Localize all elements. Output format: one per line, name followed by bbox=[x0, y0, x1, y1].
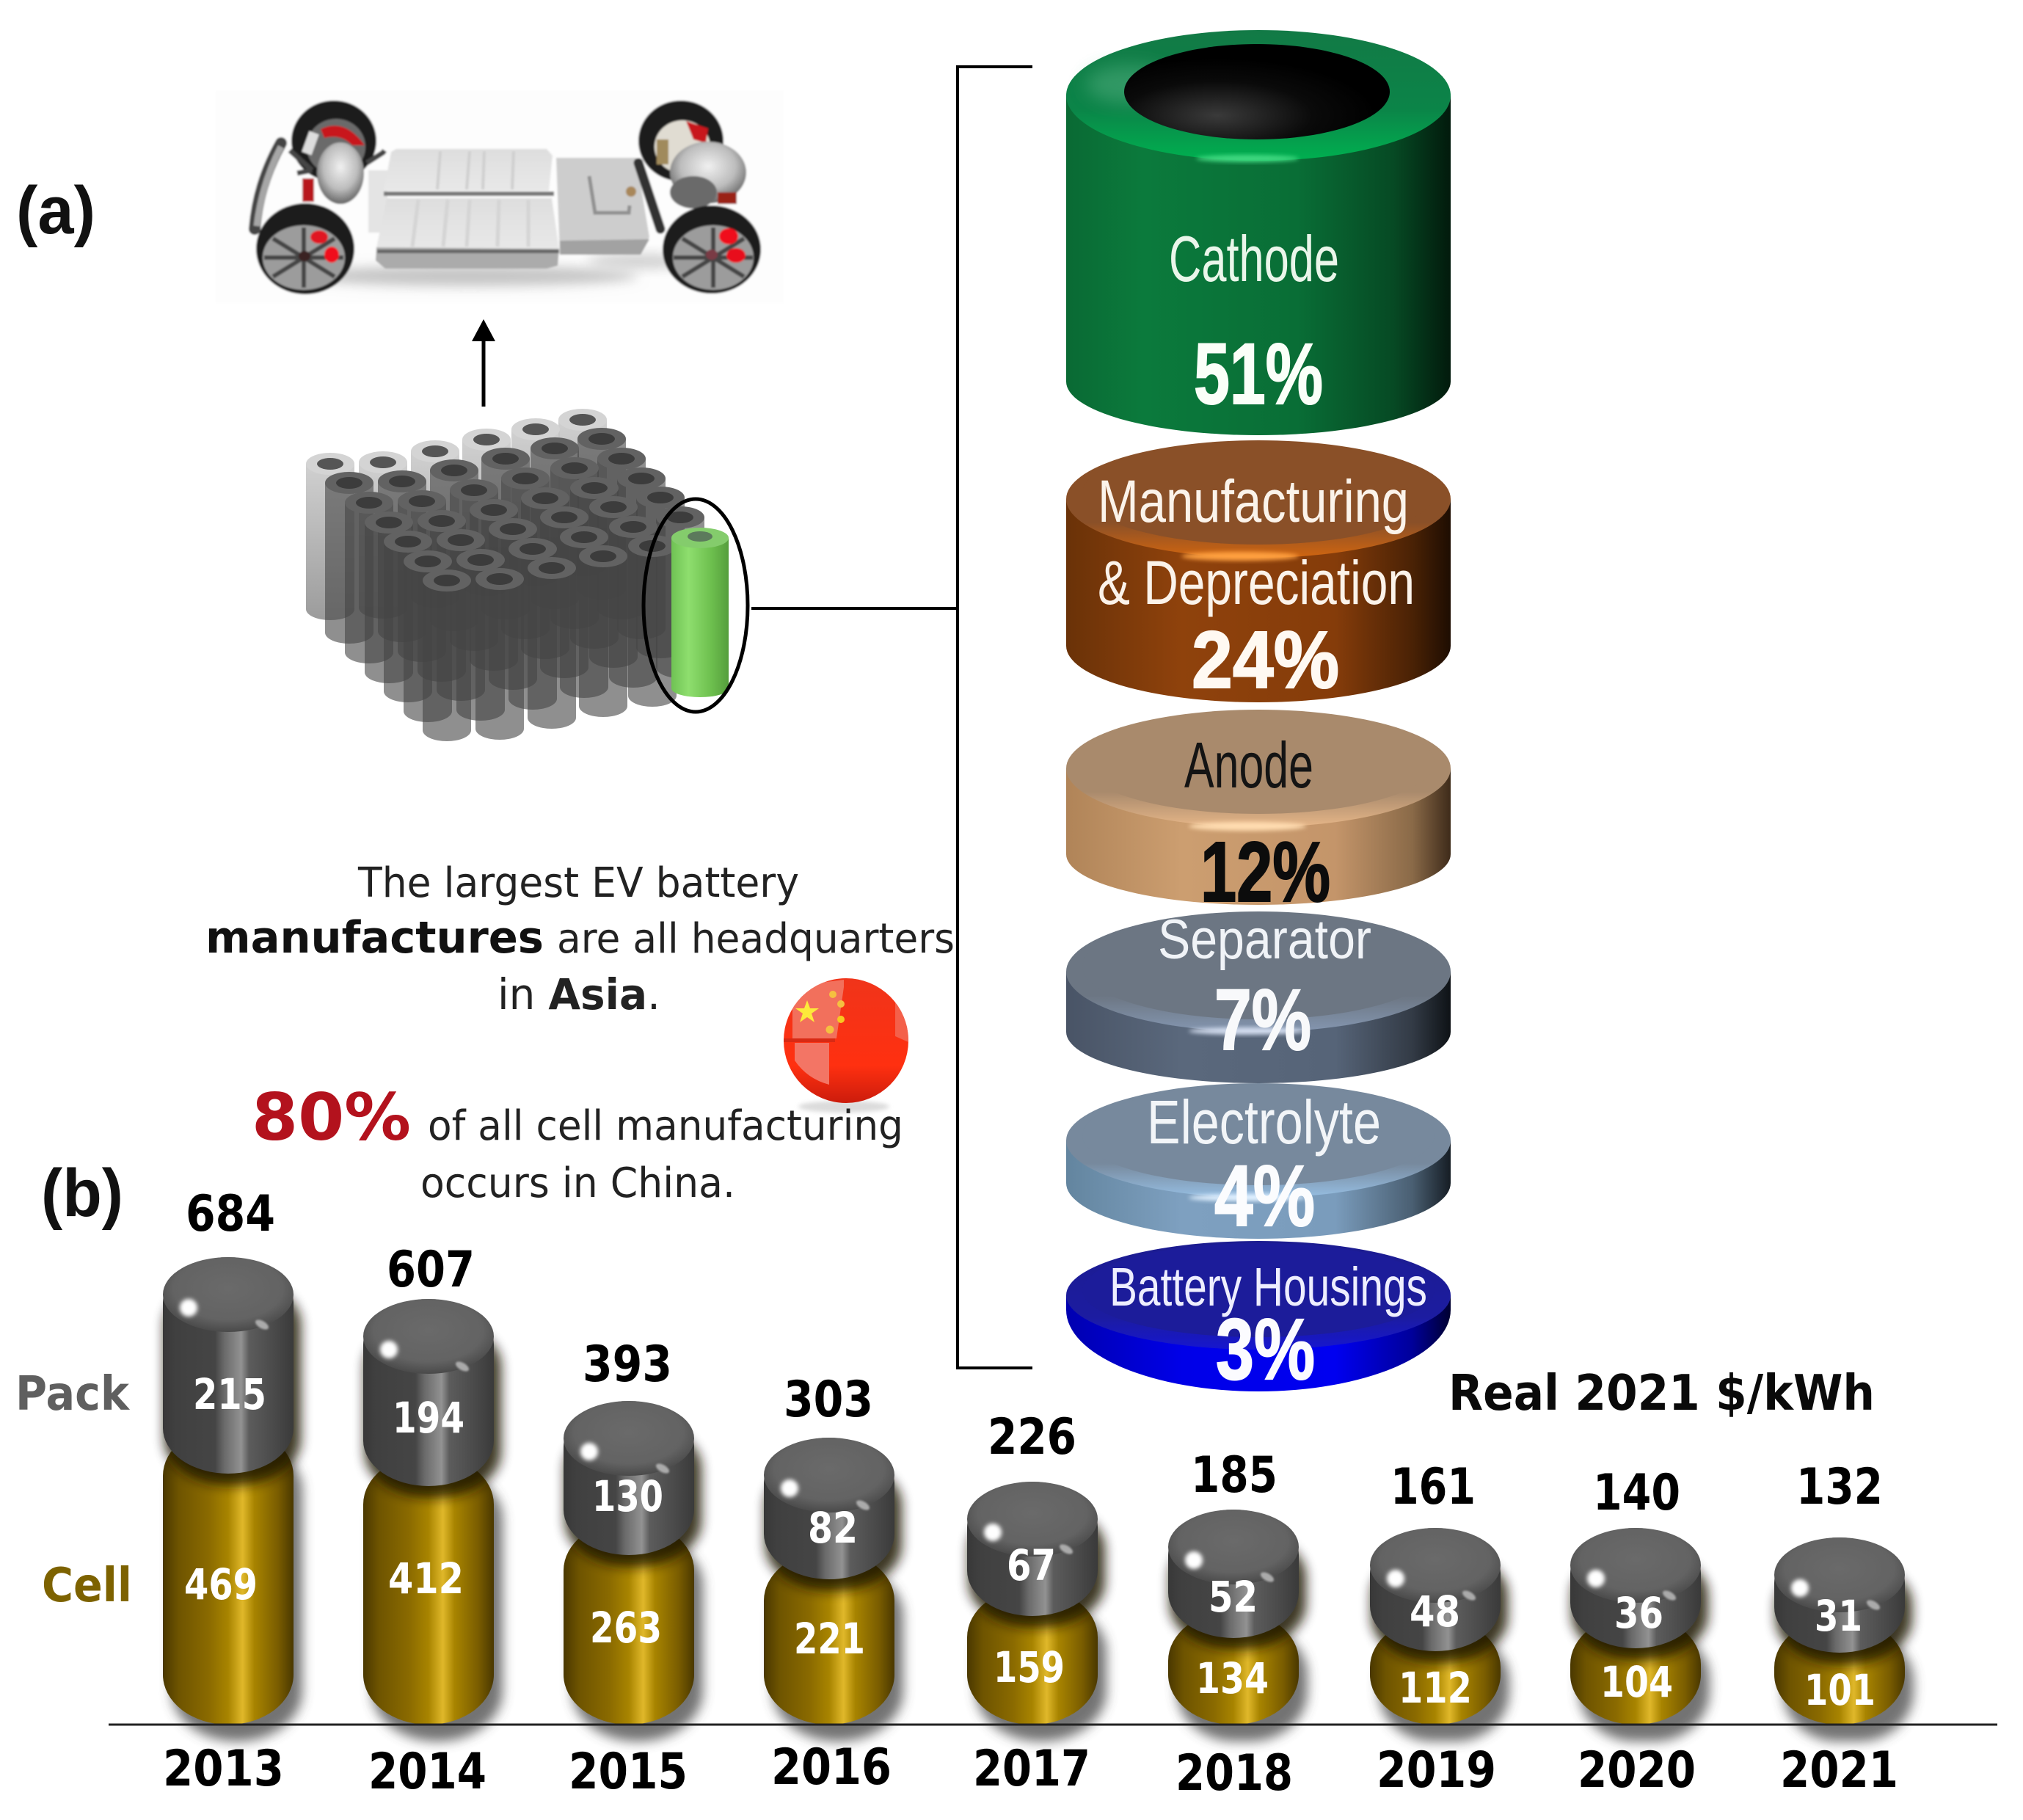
total value: 185 bbox=[1191, 1446, 1277, 1504]
bar 2019 bbox=[1370, 1458, 1509, 1799]
rear left wheel and brake bbox=[291, 101, 376, 181]
year: 2017 bbox=[973, 1740, 1090, 1798]
value: 51%: 51% bbox=[1194, 326, 1323, 423]
callout: 80% of cell manufacturing in China bbox=[252, 1080, 903, 1207]
chart axis baseline bbox=[109, 1723, 1997, 1726]
icon: battery module of cylindrical cells bbox=[306, 409, 704, 741]
pack value: 48 bbox=[1410, 1587, 1460, 1637]
bar 2016 bbox=[764, 1371, 903, 1797]
left motor bbox=[317, 142, 364, 204]
bar 2021 bbox=[1774, 1458, 1914, 1799]
year: 2016 bbox=[771, 1739, 892, 1797]
cell value: 112 bbox=[1399, 1663, 1472, 1713]
pack value: 194 bbox=[393, 1393, 464, 1443]
cell value: 412 bbox=[388, 1554, 464, 1604]
bar 2014 bbox=[363, 1241, 503, 1801]
label: manufacturing: Manufacturing bbox=[1098, 468, 1409, 535]
label: depreciation: & Depreciation bbox=[1098, 548, 1415, 617]
junction box outline bbox=[589, 176, 630, 213]
icon: highlighted green cell bbox=[671, 528, 729, 697]
battery slab edge bbox=[376, 247, 559, 269]
total value: 132 bbox=[1796, 1458, 1883, 1516]
value: 4%: 4% bbox=[1214, 1148, 1315, 1245]
unit label: Real 2021 $/kWh bbox=[1448, 1364, 1875, 1422]
disc: anode bbox=[1066, 710, 1451, 920]
year: 2019 bbox=[1377, 1741, 1496, 1799]
bar chart: battery pack price 2013-2021 bbox=[163, 1185, 1914, 1802]
battery slab front bbox=[376, 198, 559, 250]
left suspension arm bbox=[255, 143, 281, 229]
bar 2013 bbox=[163, 1185, 302, 1798]
year: 2015 bbox=[569, 1743, 688, 1801]
year: 2021 bbox=[1780, 1741, 1898, 1799]
callout ellipse around single cell bbox=[644, 499, 748, 712]
bar 2015 bbox=[564, 1336, 703, 1801]
year: 2013 bbox=[163, 1740, 284, 1798]
right motor bbox=[670, 142, 746, 203]
disc: separator bbox=[1066, 909, 1451, 1083]
value: 7%: 7% bbox=[1214, 972, 1311, 1069]
text block: manufacturers in Asia: in Asia. bbox=[497, 969, 660, 1019]
label: electrolyte: Electrolyte bbox=[1147, 1088, 1381, 1157]
label: cathode: Cathode bbox=[1169, 222, 1339, 295]
pack value: 52 bbox=[1209, 1572, 1258, 1622]
value: 3%: 3% bbox=[1216, 1301, 1315, 1398]
rear right wheel and brake bbox=[638, 101, 723, 181]
text block: manufacturers in Asia: The largest EV battery bbox=[357, 859, 799, 907]
disc: manufacturing and depreciation bbox=[1066, 440, 1451, 705]
total value: 161 bbox=[1390, 1458, 1476, 1516]
total value: 684 bbox=[186, 1185, 275, 1243]
pack value: 130 bbox=[592, 1471, 663, 1521]
cell value: 104 bbox=[1600, 1657, 1673, 1707]
cell value: 134 bbox=[1196, 1653, 1269, 1703]
text block: manufacturers in Asia: are all headquarters bbox=[557, 915, 955, 963]
year: 2014 bbox=[368, 1743, 486, 1801]
total value: 226 bbox=[988, 1408, 1076, 1466]
panel label (a): (a) bbox=[16, 173, 95, 248]
cell value: 101 bbox=[1804, 1665, 1876, 1715]
cell value: 263 bbox=[590, 1603, 662, 1653]
value: 24%: 24% bbox=[1192, 615, 1339, 705]
front right wheel bbox=[663, 205, 761, 294]
bar 2020 bbox=[1570, 1464, 1710, 1799]
year: 2020 bbox=[1578, 1741, 1696, 1799]
arrow from cell pack up to chassis bbox=[472, 319, 495, 407]
legend label: cell: Cell bbox=[42, 1559, 132, 1613]
disc: cathode bbox=[1066, 30, 1451, 435]
left strut bbox=[302, 178, 314, 202]
disc: battery housings bbox=[1066, 1241, 1451, 1398]
callout: 80% of cell manufacturing in China: of all cell manufacturing bbox=[428, 1102, 903, 1150]
pack value: 36 bbox=[1614, 1588, 1663, 1638]
panel: cost breakdown stack bbox=[1066, 30, 1451, 1398]
battery slab rear bbox=[384, 149, 553, 191]
icon: China flag ball bbox=[784, 978, 908, 1113]
bar 2018 bbox=[1168, 1446, 1308, 1802]
total value: 140 bbox=[1593, 1464, 1680, 1522]
pack value: 215 bbox=[193, 1369, 266, 1419]
year: 2018 bbox=[1175, 1744, 1293, 1802]
front left wheel bbox=[256, 203, 354, 294]
label: anode: Anode bbox=[1184, 729, 1313, 801]
bar 2017 bbox=[967, 1408, 1107, 1798]
total value: 607 bbox=[387, 1241, 475, 1299]
cell value: 221 bbox=[794, 1614, 865, 1664]
callout: 80% of cell manufacturing in China: 80% bbox=[252, 1080, 411, 1155]
label: battery housings: Battery Housings bbox=[1109, 1256, 1427, 1317]
bracket connecting cell to cost stack bbox=[751, 67, 1032, 1368]
right dark frame arm bbox=[638, 163, 660, 229]
pack value: 67 bbox=[1007, 1540, 1056, 1590]
value: 12%: 12% bbox=[1200, 824, 1330, 920]
panel label (b): (b) bbox=[41, 1156, 123, 1231]
total value: 393 bbox=[583, 1336, 672, 1394]
legend label: pack: Pack bbox=[15, 1367, 130, 1422]
callout: 80% of cell manufacturing in China: occurs in China. bbox=[420, 1160, 735, 1207]
cell value: 469 bbox=[184, 1559, 258, 1609]
text block: manufacturers in Asia: manufactures bbox=[205, 912, 544, 964]
text block: manufacturers in Asia bbox=[205, 859, 955, 1019]
label: separator: Separator bbox=[1158, 909, 1371, 971]
icon: EV skateboard chassis with battery pack bbox=[216, 90, 784, 303]
battery slab right bbox=[556, 158, 649, 255]
cell value: 159 bbox=[994, 1642, 1065, 1692]
total value: 303 bbox=[784, 1371, 873, 1429]
disc: electrolyte bbox=[1066, 1083, 1451, 1245]
pack value: 82 bbox=[808, 1503, 858, 1553]
pack value: 31 bbox=[1815, 1591, 1862, 1641]
